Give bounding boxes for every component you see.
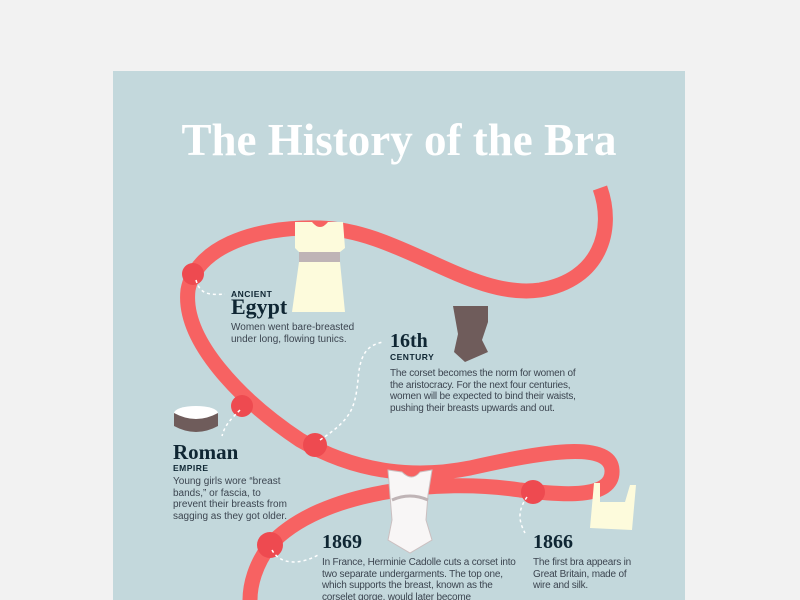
text: Egypt: [231, 294, 287, 319]
text: 1866: [533, 531, 631, 591]
text: 1869: [322, 531, 362, 553]
text: Egypt: [231, 289, 354, 344]
panel: background: [113, 71, 685, 600]
text: The first bra appears in Great Britain, made of wire and silk.: [533, 557, 631, 591]
text: CENTURY: [390, 352, 434, 362]
text: Young girls wore “breast bands,” or fascia, to prevent their breasts from sagging as they got older.: [173, 476, 287, 522]
text: 1869: [322, 531, 516, 600]
arrows: [196, 280, 527, 562]
title: The History of the Bra: [182, 115, 616, 165]
icon: corset 16th: [453, 306, 488, 362]
text: 16th: [390, 330, 428, 352]
text: 16th century: [390, 330, 576, 414]
text: Women went bare-breasted under long, flowing tunics.: [231, 322, 354, 344]
text: EMPIRE: [173, 463, 209, 473]
icon: bra 1866: [590, 483, 636, 530]
icon: tunic: [292, 222, 345, 312]
text: Roman: [173, 440, 238, 464]
text: ANCIENT: [231, 289, 272, 299]
icon: corselet: [388, 470, 432, 553]
text: The corset becomes the norm for women of the aristocracy. For the next four centuries, women will be expected to bind their waists, pushing their breasts upwards and out.: [390, 368, 576, 414]
text: Roman: [173, 440, 287, 522]
icon: roman band: [174, 406, 218, 432]
text: 1866: [533, 531, 573, 553]
